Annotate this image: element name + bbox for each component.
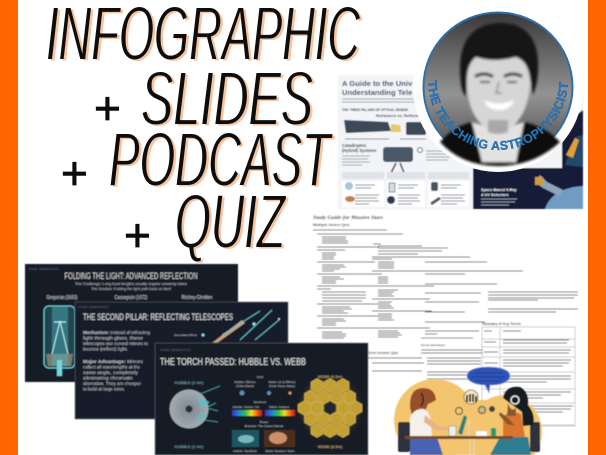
slide 1 subtitle: The Challenge: Long focal lengths usually require unwieldy tubes [75,282,187,286]
glossary heading: Glossary of Key Terms [482,322,521,326]
slide 2 telescope diagram [174,310,280,343]
infographic thumbnail: guide to telescopes: THE THREE PILLARS OF OPTICAL DESIGN [342,108,409,112]
webb panel: WEBB (6.5m) [318,374,343,379]
plus signs: + [61,147,88,199]
title: infographic + slides + podcast + quiz: SLIDES [141,56,313,142]
study guide document: Multiple choice Quiz [313,223,350,227]
hubble panel: HUBBLE (2.4m) [175,380,204,385]
quiz column 3: short answers [425,262,523,334]
glossary table [482,327,575,426]
comparison column: Power [260,420,268,424]
slide 2 body text: eliminating chromatic [83,376,133,380]
slide 3 label: STAGE: OBSERVATION [160,348,191,352]
hubble panel [170,380,220,449]
right orange bar [588,0,606,455]
webb panel [298,374,362,449]
woman right [489,387,534,455]
slide 2 body text: light through glass, these [83,336,144,340]
circular badge text: THE TEACHING ASTROPHYSICIST [428,80,568,150]
title shadow layer: SLIDES [144,58,316,144]
podcast illustration [394,367,542,455]
slide 2 body text: aberration. They are cheaper [83,381,142,386]
nebula image webb [264,430,295,447]
comparison column: (Orbits Earth) [236,384,254,388]
slide 3: the torch passed: Webb: Newborn Stars [265,449,295,453]
slide 2 body text: telescopes use curved mirrors to [83,341,149,346]
comparison column: Orbit [257,375,263,379]
plus signs [61,82,151,261]
nebula image hubble [232,430,259,447]
slide 2 body text [83,330,151,392]
comparison column: Hubble: Visible / UV [233,405,259,409]
comparison column: Webb: L2 (1.5M km) [268,380,296,384]
hubble panel: HUBBLE (2.4m) [175,444,204,449]
title shadow layer: PODCAST [112,118,335,204]
quiz column 1 [313,230,403,338]
slide 2 title: THE SECOND PILLAR: REFLECTING TELESCOPES [83,312,233,323]
slide 2 body text: Major Advantage: Mirrors [83,359,143,364]
slide 2 body text: bounce (reflect) light. [83,346,128,352]
people icon [464,390,478,404]
laptop and cup [458,415,467,435]
telescope diagram [44,306,75,376]
title shadow layer: QUIZ [178,180,289,266]
slide 1: folding the light: Ritchey-Chrétien [182,295,213,301]
slide 1: folding the light [25,264,238,382]
slide 2 body text: collect all wavelengths at the [83,364,141,370]
comparison column: Hubble: 550 km [234,380,256,384]
infographic thumbnail: guide to telescopes: A Guide to the Univ [342,79,413,88]
slide 3: the torch passed [155,343,368,455]
study guide heading: Study Guide for Massive Stars [313,215,383,221]
title: infographic + slides + podcast + quiz [46,0,361,265]
slide 1 label: STAGE: OBSERVATION [28,267,59,271]
chairs [398,422,410,452]
infographic thumbnail: guide to telescopes: (Hybrid) Systems [342,148,377,153]
title: infographic + slides + podcast + quiz: QUIZ [175,179,287,265]
dark space panel [473,110,583,209]
slide 3 title: THE TORCH PASSED: HUBBLE VS. WEBB [160,356,306,368]
dark space panel: & UV Detectors [481,193,509,197]
slide 1: folding the light: The Solution: Folding the light path back on itself [91,287,171,291]
dark space panel: Space-Based X-Ray [481,188,518,192]
comparison column [232,375,296,428]
speech bubble [467,367,510,393]
yellow background blobs [394,379,542,455]
plus signs: + [124,209,151,261]
infographic thumbnail: guide to telescopes: Understanding Tele [342,88,412,97]
quiz column 2 [372,244,470,337]
left orange bar [0,0,18,455]
slide 2 body text: Mechanism: Instead of refracting [83,330,151,335]
photo of man [440,23,560,166]
slide 1 title: FOLDING THE LIGHT: ADVANCED REFLECTION [64,271,198,281]
infographic thumbnail: guide to telescopes [338,75,583,209]
study guide document [305,210,583,455]
webb panel: WEBB (6.5m) [318,444,343,449]
comparison column: Webb: Infrared [269,405,289,409]
infographic thumbnail: guide to telescopes: Refractors vs. Reflectors [376,113,424,118]
slide 1: folding the light: Cassegrain (1672) [114,295,148,301]
comparison column: Example: The Carina Nebula [245,424,284,428]
table [405,436,513,439]
title shadow layer [48,0,363,266]
comparison column: (Cold, Faces Away) [269,384,295,388]
small icons [456,408,462,414]
woman left [410,388,451,455]
slide 2 body text: to build at large sizes. [83,386,125,392]
title: infographic + slides + podcast + quiz: PODCAST [109,117,333,203]
slide 3: the torch passed: Hubble: Gas/Dust [233,449,257,453]
slide 2 label: STAGE: OBSERVATION [78,305,109,309]
slide 2 body text: same angle, completely [83,370,139,375]
study guide document: Essay Questions [421,343,446,347]
essay notes [488,292,578,312]
study guide document: Short Answer Quiz [368,351,399,355]
slide 2 telescope diagram: Secondary Mirror [174,333,197,337]
infographic thumbnail: guide to telescopes: Catadioptric [342,143,367,148]
slide 1 columns: Gregorian (1663) [46,295,78,301]
slide 2: the second pillar [75,302,288,419]
profile badge: The Teaching Astrophysicist [413,12,583,172]
comparison column: Spectrum [254,400,267,404]
plus signs: + [94,82,121,134]
